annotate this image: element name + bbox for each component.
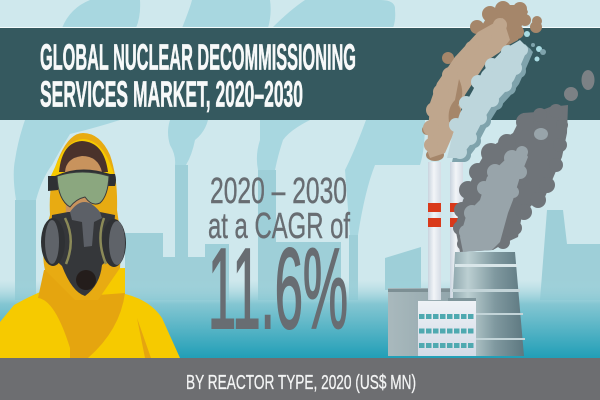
left filter: [41, 218, 71, 266]
brown streak: [449, 79, 462, 123]
text: 11.6%: [208, 226, 348, 353]
cooling tower: [452, 252, 525, 356]
title band: [0, 27, 600, 120]
suit folds: [38, 270, 151, 358]
water gradient: [0, 280, 600, 360]
light smoke body: [459, 146, 528, 252]
dark smoke body: [453, 104, 568, 252]
grey smoke plume: [453, 70, 594, 252]
goggles strap: [48, 169, 116, 191]
droplets: [524, 31, 546, 62]
beige body: [423, 18, 510, 158]
steam body: [447, 40, 528, 159]
respirator: [50, 212, 115, 296]
right filter: [100, 218, 126, 267]
brown smoke plume: [422, 1, 542, 161]
steam shadow: [452, 44, 533, 162]
face: [65, 156, 102, 215]
CAGR callout: [208, 170, 351, 353]
footer text: BY REACTOR TYPE, 2020 (US$ MN): [186, 372, 416, 394]
power plant: [388, 162, 525, 356]
background factory silhouettes and smoke: [14, 0, 600, 300]
footer bar: [0, 358, 600, 400]
goggle lens: [57, 172, 109, 207]
suit body: [0, 268, 180, 358]
chimneys: [428, 162, 463, 300]
title: SERVICES MARKET, 2020–2030: [40, 74, 303, 114]
dark brown top: [422, 1, 542, 161]
reactor building: [418, 298, 476, 356]
title: [40, 36, 356, 114]
CAGR callout: 2020 – 2030: [210, 170, 347, 211]
worker in hazmat suit: [0, 133, 180, 358]
hair: [59, 141, 108, 172]
pale steam plume: [447, 31, 546, 162]
respirator nose: [70, 202, 102, 247]
respirator mouth: [76, 270, 96, 290]
CAGR callout: at a CAGR of: [208, 205, 351, 246]
hood: [43, 133, 121, 300]
back hall: [388, 288, 458, 356]
